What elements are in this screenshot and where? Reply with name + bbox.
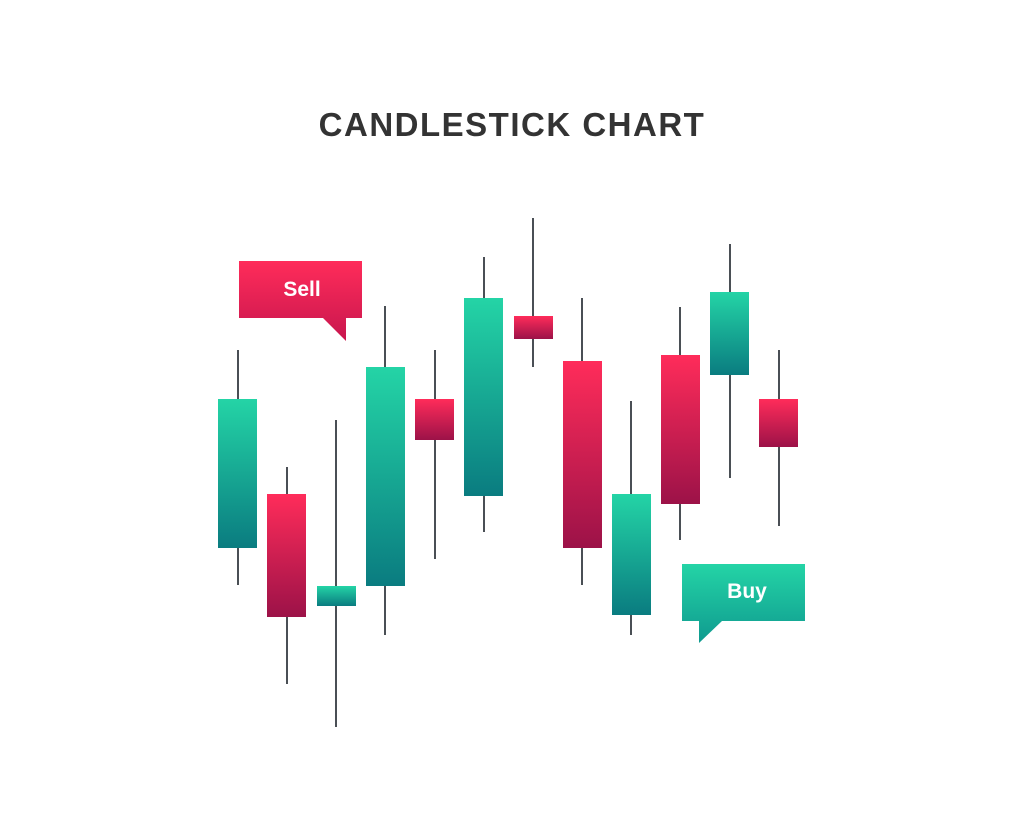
callout: buy: Buy bbox=[727, 580, 767, 603]
callout: sell: Sell bbox=[283, 278, 321, 301]
callout: sell bbox=[239, 261, 362, 341]
candles bbox=[238, 218, 779, 727]
callout: buy bbox=[682, 564, 805, 643]
title: CANDLESTICK CHART bbox=[319, 106, 705, 143]
